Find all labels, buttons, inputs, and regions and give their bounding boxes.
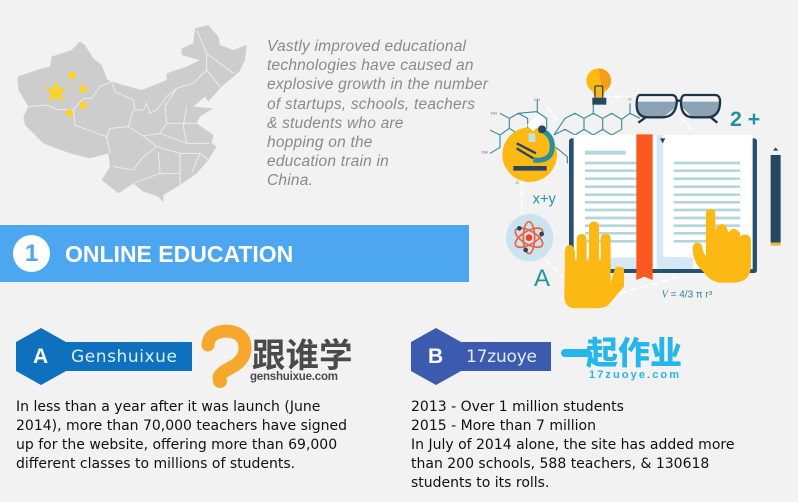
- label A: Genshuixue: Genshuixue: [71, 347, 177, 367]
- icon: glasses: [637, 95, 720, 123]
- number badge: [13, 235, 50, 272]
- dashed connectors: [522, 97, 693, 293]
- logo: genshuixue: 跟谁学: [252, 328, 352, 377]
- icon: left hand: [564, 222, 624, 308]
- paragraph A: [16, 399, 347, 472]
- map of China: [17, 25, 246, 202]
- paragraph B: students to its rolls.: [411, 475, 549, 491]
- education illustration: = 4/3 π r³: [671, 290, 713, 301]
- icon: right hand: [693, 209, 751, 283]
- molecule labels: CH: [534, 97, 540, 102]
- label B: 17zuoye: B: [428, 345, 443, 368]
- text: x+y: x+y: [533, 191, 557, 207]
- formula: V: [662, 290, 670, 301]
- paragraph A: 2014), more than 70,000 teachers have signed: [16, 418, 347, 434]
- paragraph B: than 200 schools, 588 teachers, & 130618: [411, 456, 709, 472]
- flag stars: [45, 72, 87, 117]
- molecule labels: O: [628, 97, 631, 102]
- text: A: A: [534, 265, 550, 292]
- intro text: [267, 38, 488, 189]
- section banner: [0, 225, 469, 282]
- intro text: explosive growth in the number: [267, 76, 488, 93]
- molecule: [490, 98, 640, 163]
- molecule labels: [482, 97, 631, 185]
- intro text: education train in: [267, 153, 389, 170]
- paragraph B: In July of 2014 alone, the site has added more: [411, 437, 734, 453]
- intro text: China.: [267, 172, 313, 189]
- logo: genshuixue: genshuixue.com: [250, 371, 338, 383]
- icon: pencil: [771, 147, 781, 246]
- molecule labels: OH: [491, 110, 497, 115]
- molecule labels: C: [516, 180, 519, 185]
- number badge: 1: [25, 240, 38, 267]
- label B: 17zuoye: 17zuoye: [466, 347, 537, 367]
- logo: 17zuoye: 起作业: [586, 328, 682, 374]
- label A: Genshuixue: A: [33, 345, 48, 368]
- text: 2 +: 2 +: [730, 107, 760, 131]
- intro text: & students who are: [267, 115, 404, 132]
- paragraph A: different classes to millions of students.: [16, 456, 295, 472]
- open book: [569, 134, 757, 280]
- section heading: ONLINE EDUCATION: [65, 241, 293, 267]
- paragraph B: 2015 - More than 7 million: [411, 418, 596, 434]
- logo: 17zuoye: 17zuoye.com: [589, 369, 679, 381]
- intro text: hopping on the: [267, 134, 373, 151]
- paragraph B: 2013 - Over 1 million students: [411, 399, 624, 415]
- intro text: Vastly improved educational: [267, 38, 466, 55]
- paragraph A: up for the website, offering more than 69,000: [16, 437, 337, 453]
- icon: atom: [506, 214, 553, 261]
- icon: light bulb: [586, 68, 611, 105]
- icon: microscope: [502, 117, 557, 182]
- molecule labels: OH: [482, 149, 488, 154]
- intro text: technologies have caused an: [267, 57, 474, 74]
- paragraph A: In less than a year after it was launch (June: [16, 399, 320, 415]
- intro text: of startups, schools, teachers: [267, 96, 475, 113]
- paragraph B: [411, 399, 734, 491]
